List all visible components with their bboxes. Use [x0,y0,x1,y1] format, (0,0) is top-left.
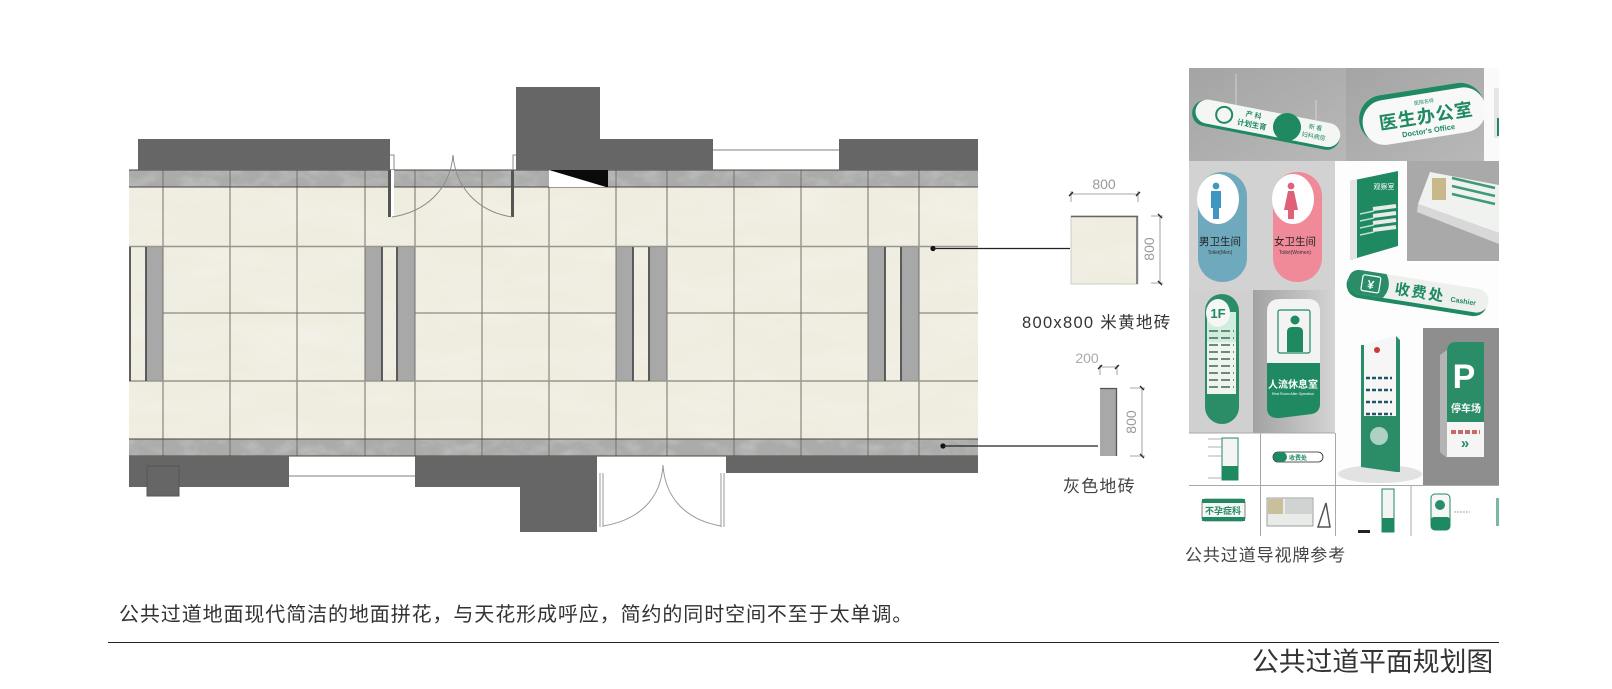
leader line: grey tile [940,443,1098,449]
photo: cashier sign [1335,262,1499,485]
toilet sign: men [1197,172,1247,282]
description text: 公共过道地面现代简洁的地面拼花，与天花形成呼应，简约的同时空间不至于太单调。 [119,603,913,626]
photo: doctor's office sign: 医院名称 [1414,97,1434,107]
dimension: tile height: 800 [1141,237,1157,261]
thumbnail: notice board [1267,498,1330,527]
thumbnail: slim totem drawing [1358,489,1394,533]
photo: parking sign: » [1461,435,1469,452]
top window line [713,149,839,151]
toilet sign: women [1272,172,1322,282]
thumbnail: cashier pill [1273,452,1323,462]
grey inlay strips [146,247,919,381]
walls [129,87,978,532]
rest room sign: 人流休息室 [1268,378,1318,391]
dimension: strip height: 800 [1123,410,1139,434]
floor plan [129,87,978,532]
photo: sliver of next sign [1484,68,1499,161]
thumbnail: totem drawing [1208,438,1238,480]
photo: cashier sign: Cashier [1450,297,1477,307]
photo: hanging sign: 妇科病房 [1301,130,1326,143]
dimension: tile width: 800 [1092,176,1116,192]
dimension: strip width: 200 [1075,350,1099,366]
page title: 公共过道平面规划图 [1252,647,1493,677]
thumbnail: cut-off sign [1496,498,1499,526]
bottom window line [289,475,415,477]
bottom double door [600,465,724,527]
photo: desk plate [1407,161,1499,261]
photo: cashier sign: 收费处 [1394,280,1447,306]
thumbnail: clinic plate [1202,499,1245,521]
sample: cream tile [1069,176,1163,285]
top double door [388,155,516,217]
rest room sign: Rest Room After Operation [1272,392,1314,396]
toilet sign: men: Toilet(Men) [1208,250,1233,256]
tile grout lines [129,170,978,456]
photo: hanging sign [1189,68,1346,161]
photo: hanging sign: 产 科 [1245,109,1262,121]
photo: toilet signs [1189,161,1335,433]
thumbnail: room plate [1431,494,1470,530]
photo: parking sign: P [1453,358,1475,396]
label: grey tile: 灰色地砖 [1063,477,1136,496]
grey border band: bottom [129,439,978,456]
toilet sign: women: Toilet(Women) [1279,250,1311,256]
floor directory sign: 1F [1210,306,1226,321]
cream floor tiles [129,170,978,456]
toilet sign: women: 女卫生间 [1274,235,1316,248]
photo: parking sign [1423,328,1499,485]
drawing thumbnails [1189,433,1499,536]
photo: hanging sign: 新 看 [1308,122,1323,133]
photo: parking sign: 停车场 [1451,402,1481,415]
photo: wall plaque: 观察室 [1374,182,1394,191]
thumbnail: cashier pill: 收费处 [1289,454,1307,462]
photo: hanging sign: 计划生育 [1236,117,1268,132]
leader line: cream tile [930,246,1070,251]
black triangle mark [549,170,608,187]
photo: totem sign [1338,336,1422,483]
label: cream tile: 800x800 米黄地砖 [1022,313,1172,332]
signage reference collage [1189,68,1499,536]
photo: doctor's office sign [1346,68,1489,161]
toilet sign: men: 男卫生间 [1199,235,1241,248]
grey border band: top [129,170,978,187]
rest room sign [1267,299,1320,418]
photo: doctor's office sign: Doctor's Office [1401,122,1456,139]
floor directory sign [1205,294,1239,424]
photo: wall plaque [1335,161,1407,262]
photo: doctor's office sign: 医生办公室 [1378,98,1475,134]
caption: signage reference: 公共过道导视牌参考 [1185,546,1346,565]
photo: cashier sign: ¥ [1366,277,1375,292]
sample: grey tile [1075,350,1145,458]
thumbnail: clinic plate: 不孕症科 [1205,505,1241,516]
